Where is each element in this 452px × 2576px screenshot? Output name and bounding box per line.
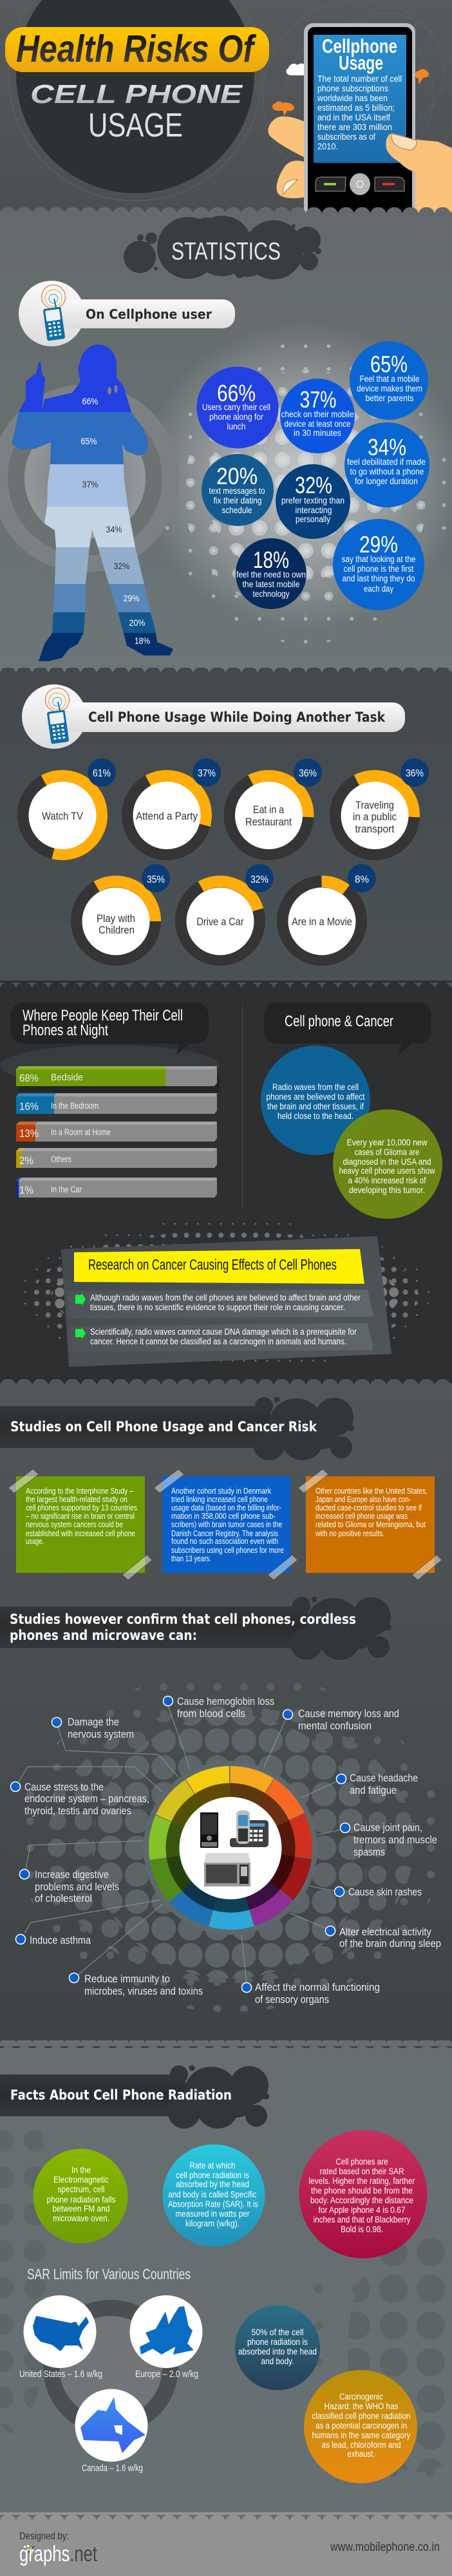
fact bubble: SAR definition: Absorption Rate (SAR). It is (168, 2199, 258, 2209)
bar: Bedside 68% (16, 1066, 220, 1092)
donut: Play with Children 35% (62, 864, 170, 974)
cancer bubble: radio waves: phones are believed to affect (267, 1092, 365, 1102)
color wheel with devices (127, 1745, 334, 1951)
stat bubble 65%: 65% (370, 351, 408, 377)
fact bubble: carcinogenic hazard (304, 2370, 417, 2483)
phone screen heading: Usage (339, 52, 383, 74)
fact bubble: SAR ratings: Bold is 0.98. (341, 2224, 383, 2234)
stat bubble 34%: feel debilitated if made (347, 457, 426, 467)
stat bubble 29%: each day (364, 584, 393, 594)
donut: Play with Children 35%: Children (99, 924, 135, 936)
credit label: Designed by: (19, 2531, 69, 2542)
title: Cell Phone: CELL PHONE (30, 79, 243, 109)
icon: orange cloud right (415, 69, 429, 84)
icon: orange cloud left (272, 102, 294, 116)
title backdrop circle (8, 0, 262, 201)
bar: In the Car 1%: In the Car (51, 1185, 82, 1194)
map: Europe (130, 2295, 202, 2380)
stat bubble 66%: 66% (217, 380, 256, 406)
effect: memory loss: Cause memory loss and (298, 1707, 399, 1720)
phone body (304, 23, 415, 223)
stat bubble 66% (197, 367, 278, 448)
fact bubble: absorption: and body. (261, 2356, 294, 2366)
donut: Attend a Party 37%: Attend a Party (136, 810, 198, 822)
bar: Bedside 68%: 68% (19, 1072, 39, 1084)
band labels: 32% (113, 561, 130, 571)
cancer bubble: glioma: developing this tumor. (349, 1185, 425, 1195)
stat bubble 65%: Feel that a mobile (359, 374, 420, 384)
stat bubble 32%: interacting (295, 505, 332, 515)
donut: Traveling in a public transport 36%: Traveling (355, 799, 394, 811)
stat bubble 32%: prefer texting than (281, 496, 344, 505)
fact bubble: SAR ratings: body. Accordingly the distance (310, 2195, 413, 2205)
cancer bubble: glioma: heavy cell phone users show (339, 1166, 435, 1176)
phone hand gaps (108, 385, 117, 395)
banner heading: Studies however confirm (0, 1597, 391, 1660)
stat bubble 29%: say that looking at the (341, 554, 416, 564)
effect: hemoglobin loss: Cause hemoglobin loss (177, 1695, 274, 1707)
section: statistics background (0, 207, 452, 675)
bar chart: where phones are kept (16, 1066, 220, 1198)
stat bubble 66%: lunch (227, 422, 246, 431)
phone screen heading: Cellphone (322, 35, 397, 57)
effect: endocrine stress (10, 1781, 149, 1817)
effect: headache: Cause headache (350, 1772, 418, 1784)
wheel rim (144, 1761, 317, 1935)
study card: other countries: increased cell phone usage was (315, 1512, 408, 1521)
bar: In the Car 1%: 1% (19, 1184, 33, 1196)
study card: Interphone: the largest health-related study on (26, 1495, 127, 1504)
fact bubble: carcinogenic hazard: classified cell phone radiation (312, 2411, 411, 2421)
stat bubble 37%: in 30 minutes (294, 428, 341, 438)
effect: sensory organs: Affect the normal functioning (255, 1981, 380, 1993)
cancer bubble: glioma: diagnosed in the USA and (343, 1157, 431, 1167)
left finger (268, 117, 306, 158)
halftone backdrop behind wheel (18, 1671, 443, 2012)
illustration: hand holding phone (263, 0, 452, 223)
fact bubble: SAR definition: cell phone radiation is (176, 2170, 249, 2180)
effect: memory loss (283, 1707, 399, 1732)
phone screen text: worldwide has been (317, 93, 388, 103)
finding one: tissues, there is no scientific evidence to support their role in causing cancer. (90, 1302, 345, 1312)
fact bubble: electromagnetic spectrum: spectrum, cell (58, 2185, 104, 2194)
fact bubble: SAR definition: measured in watts per (175, 2209, 250, 2219)
study card: Interphone (8, 1469, 152, 1580)
donut: Eat in a Restaurant 36%: Eat in a (253, 804, 284, 816)
donut: Eat in a Restaurant 36%: Restaurant (245, 816, 292, 828)
effect: endocrine stress: thyroid, testis and ovaries (24, 1805, 131, 1817)
stat bubble 20%: text messages to (209, 486, 265, 496)
research card (61, 1236, 391, 1367)
stat bubble 32% (276, 464, 350, 539)
fact bubble: electromagnetic spectrum: phone radiation falls (46, 2195, 116, 2205)
phone screen text: 2010. (317, 142, 338, 151)
donut: Play with Children 35%: Play with (97, 912, 135, 925)
finding two: cancer. Hence it cannot be classified as a carcinogen in animals and humans. (90, 1337, 346, 1346)
phone screen heading (322, 35, 397, 74)
stat bubble 65% (350, 341, 428, 420)
cancer bubble: radio waves (261, 1046, 370, 1155)
icon: cordless phone (230, 1810, 268, 1847)
stat bubble 20%: schedule (221, 505, 252, 515)
map: Canada: Canada – 1.6 w/kg (82, 2463, 143, 2474)
donut: Eat in a Restaurant 36%: 36% (299, 768, 317, 779)
stat bubble 32%: 32% (295, 472, 332, 498)
banner heading: Studies on Cell Phone Usage and Cancer Risk (0, 1397, 354, 1460)
study card: Denmark: subscribers using cell phones for more (171, 1546, 284, 1555)
fact bubble: SAR definition: absorbed by the head (176, 2179, 249, 2189)
header title group (5, 0, 269, 201)
phone screen text: and in the USA itself (317, 113, 390, 122)
effect: joint pain: tremors and muscle (353, 1834, 437, 1846)
effect: electrical activity: Alter electrical activity (339, 1926, 431, 1938)
effect: headache (336, 1772, 418, 1796)
fact bubble: electromagnetic spectrum: Electromagnetic (53, 2175, 109, 2185)
donut: Traveling in a public transport 36%: in a public (353, 811, 397, 823)
stat bubble 37%: device at least once (285, 419, 350, 429)
study card: Denmark: Another cohort study in Denmark (171, 1487, 272, 1496)
connecting ring (43, 2300, 178, 2435)
fact bubble: SAR definition: Rate at which (189, 2161, 236, 2170)
study card: Denmark: scribers) with brain tumor cases in the (171, 1520, 282, 1529)
stat bubble 65%: better parents (366, 393, 414, 403)
study card: Denmark: than 13 years. (171, 1554, 211, 1563)
effect: headache: and fatigue (350, 1784, 397, 1796)
phone screen text: phone subscriptions (317, 84, 388, 93)
bar: In the Car 1% (16, 1178, 217, 1198)
finding one (68, 1290, 373, 1319)
logo pixels (23, 2545, 34, 2553)
research heading: Research on Cancer Causing Effects of Cell Phones (88, 1256, 337, 1273)
heading text: STATISTICS (171, 238, 281, 265)
study card: Interphone: usage. (26, 1537, 44, 1546)
stat bubble 18% (236, 538, 306, 609)
speech bubble heading: Cell phone and Cancer: Cell phone & Cancer (285, 1013, 393, 1030)
icon: mobile phone (200, 1812, 218, 1848)
band labels: 66% (82, 396, 98, 406)
map: Canada (75, 2389, 148, 2474)
bar: In the Bedroom 16%: 16% (19, 1100, 39, 1113)
fact bubble: carcinogenic hazard: humans in the same category (312, 2430, 411, 2440)
study card: other countries (298, 1469, 442, 1580)
study card: Interphone: According to the Interphone Study – (26, 1487, 133, 1496)
study card: Interphone: cell phones supported by 13 countries (26, 1503, 137, 1512)
icon: white cloud (287, 64, 306, 75)
halftone backdrop behind stat bubbles (142, 322, 452, 644)
effect: digestive problems: problems and levels (35, 1881, 119, 1893)
effect: reduce immunity (70, 1973, 203, 1997)
bar: Others 2%: Others (51, 1154, 71, 1164)
banner heading: Facts About Cell Phone Radiation: Facts About Cell Phone Radiation (10, 2087, 232, 2103)
donut: Drive a Car 32%: Drive a Car (197, 916, 244, 928)
signal rings (263, 0, 452, 193)
fact bubble: absorption: absorbed into the head (238, 2347, 317, 2356)
phone buttons (315, 173, 404, 195)
study card: Interphone: nervous system cancers could be (26, 1520, 123, 1529)
section: header background (0, 0, 452, 222)
donut: Are in a Movie 8%: 8% (355, 874, 369, 885)
study card: other countries: with no positive results. (315, 1529, 384, 1538)
study card: Denmark: mation in 358,000 cell phone sub- (171, 1512, 276, 1521)
bar: Others 2% (16, 1148, 217, 1168)
right hand and thumb (386, 133, 452, 222)
icon: phone with signal (45, 688, 70, 744)
stat bubble 29% (333, 519, 424, 610)
fact bubble: SAR ratings: for Apple iphone 4 is 0.67 (318, 2205, 406, 2215)
stat bubble 32%: personally (296, 514, 330, 524)
bar: In the Bedroom 16% (16, 1093, 217, 1114)
fact bubble: absorption: phone radiation is (247, 2337, 308, 2347)
stat bubble 66%: phone along for (209, 412, 263, 422)
donut: Are in a Movie 8% (283, 864, 376, 960)
cancer bubble: glioma (333, 1109, 442, 1219)
person silhouette chart (0, 344, 173, 661)
study card: Denmark: usage data (based on the billing infor- (171, 1503, 281, 1512)
leader lines (19, 1706, 340, 1983)
phone screen text: The total number of cell (317, 74, 402, 84)
speech bubble heading: Cell phone and Cancer (264, 1002, 431, 1055)
fact bubble: carcinogenic hazard: Hazard: the WHO has (325, 2402, 399, 2411)
pill label: Cell Phone Usage While Doing Another Task (88, 710, 386, 725)
stat bubble 29%: and last thing they do (343, 574, 415, 583)
section: radiation facts background (0, 2040, 452, 2521)
band labels: 37% (82, 479, 98, 489)
band labels: 34% (106, 524, 122, 534)
title: Usage: USAGE (88, 107, 183, 144)
donut: Watch TV 61%: Watch TV (42, 810, 84, 822)
card panel (61, 1236, 391, 1367)
donut: Watch TV 61%: 61% (93, 768, 111, 779)
cloud shape (124, 216, 321, 279)
section: multitasking background (0, 668, 452, 991)
fact bubble: SAR definition: and body is called Specific (169, 2190, 257, 2199)
fact bubble: SAR ratings: the phone should be from the (311, 2186, 413, 2195)
cancer bubble: glioma: a 40% increased risk of (348, 1176, 426, 1185)
study card: other countries: Other countries like the United States, (315, 1487, 428, 1496)
cancer bubble: radio waves: Radio waves from the cell (272, 1082, 359, 1092)
effect: digestive problems: of cholesterol (35, 1892, 92, 1904)
fact bubble: carcinogenic hazard: as a potential carcinogen in (315, 2421, 407, 2430)
donut: Traveling in a public transport 36%: 36% (406, 768, 424, 779)
bar: In a Room at Home 13%: In a Room at Home (51, 1127, 111, 1137)
footer (0, 2512, 452, 2576)
donut: Drive a Car 32% (167, 864, 274, 974)
fact bubble: SAR ratings: levels. Higher the rating, farther (309, 2176, 415, 2186)
fact bubble: electromagnetic spectrum: microwave oven. (53, 2214, 109, 2223)
stat bubble 20%: fix their dating (214, 496, 261, 505)
stat bubble 29%: 29% (359, 531, 398, 558)
donut: Play with Children 35%: 35% (147, 874, 165, 885)
effect: damage nervous system: nervous system (68, 1728, 134, 1740)
map: United States: United States – 1.6 w/kg (19, 2369, 102, 2380)
fact bubble: electromagnetic spectrum (33, 2149, 127, 2243)
phone screen text: estimated as 5 billion; (317, 103, 395, 113)
effect: digestive problems (19, 1868, 119, 1904)
fact bubble: electromagnetic spectrum: between FM and (53, 2204, 109, 2214)
icon: microwave (204, 1853, 250, 1886)
heading pill: On Cellphone user (19, 281, 235, 346)
finding two (69, 1323, 373, 1352)
effect: memory loss: mental confusion (298, 1720, 372, 1732)
effect: joint pain: Cause joint pain, (353, 1821, 422, 1834)
fact bubble: carcinogenic hazard: exhaust. (348, 2449, 375, 2459)
effect: sensory organs: of sensory organs (255, 1993, 329, 2006)
cancer bubble: radio waves: held close to the head. (278, 1111, 353, 1121)
donut: Attend a Party 37%: 37% (198, 768, 216, 779)
stat bubble 20%: 20% (216, 463, 258, 489)
left thumb (277, 161, 306, 198)
effect: hemoglobin loss: from blood cells (177, 1707, 245, 1720)
yellow heading strip (74, 1249, 364, 1284)
band labels: 20% (129, 617, 146, 628)
pill label: On Cellphone user (86, 306, 212, 322)
stat bubble 18%: 18% (253, 547, 289, 573)
donut: Watch TV 61% (10, 758, 116, 868)
effect: electrical activity (326, 1926, 441, 1950)
effect: endocrine stress: Cause stress to the (24, 1781, 104, 1793)
fact bubble: carcinogenic hazard: Carcinogenic (339, 2392, 383, 2402)
effect: endocrine stress: endocrine system – pancreas, (24, 1792, 149, 1805)
divider (242, 1004, 243, 1208)
bar: Others 2%: 2% (19, 1154, 33, 1167)
stacked bands (12, 344, 173, 661)
title ribbon (5, 27, 269, 72)
fact bubble: SAR ratings: rated based on their SAR (319, 2167, 404, 2176)
section: studies background (0, 1379, 452, 2050)
fact bubble: SAR ratings (299, 2130, 428, 2259)
stat bubble 66%: Users carry their cell (202, 402, 270, 412)
donut: Traveling in a public transport 36% (322, 758, 429, 868)
icon: phone with signal (41, 285, 66, 341)
stat bubble 37%: 37% (300, 386, 336, 413)
fact bubble: SAR definition (162, 2144, 265, 2247)
banner heading: Facts About Cell Phone Radiation (0, 2065, 269, 2129)
banner heading: Studies however confirm: phones and microwave can: (10, 1628, 197, 1643)
fact bubble: SAR ratings: Cell phones are (336, 2157, 388, 2167)
section: night and cancer background (0, 981, 452, 1391)
study card: Denmark: found no such association even with (171, 1537, 278, 1546)
stat bubble 20% (202, 454, 274, 526)
fact bubble: electromagnetic spectrum: In the (71, 2165, 91, 2175)
finding one: Although radio waves from the cell phones are believed to affect brain and other (90, 1293, 361, 1302)
concentric rings (0, 384, 179, 572)
effect: digestive problems: Increase digestive (35, 1868, 109, 1881)
phone screen text: there are 303 million (317, 122, 392, 132)
effect: asthma: Induce asthma (30, 1934, 91, 1946)
effect: sensory organs (242, 1981, 380, 2006)
effect: reduce immunity: Reduce immunity to (84, 1973, 170, 1985)
donut: Traveling in a public transport 36%: transport (355, 823, 395, 835)
dark inner segments (149, 1767, 312, 1929)
effect: reduce immunity: microbes, viruses and toxins (84, 1985, 203, 1997)
speech bubble heading: Where People Keep Their Cell Phones at Night: Phones at Night (23, 1022, 108, 1039)
band labels: 18% (135, 635, 150, 646)
effect: damage nervous system (52, 1716, 134, 1740)
SAR limits diagram (19, 2295, 202, 2474)
bright segments (127, 1745, 334, 1951)
stat bubble 37%: check on their mobile (281, 409, 354, 419)
stat bubble 34%: to go without a phone (350, 467, 424, 476)
stat bubble 34%: 34% (368, 434, 406, 460)
study card: other countries: Japan and Europe also have con- (315, 1495, 411, 1504)
donut: Attend a Party 37% (114, 758, 221, 868)
heading: SAR Limits: SAR Limits for Various Countries (27, 2266, 191, 2282)
effect: joint pain: spasms (353, 1846, 385, 1858)
donut: Are in a Movie 8%: Are in a Movie (292, 916, 352, 928)
donut: Eat in a Restaurant 36% (216, 758, 322, 868)
effect: hemoglobin loss (164, 1695, 274, 1720)
cancer bubble: glioma: cases of Glioma are (354, 1147, 420, 1157)
effect: joint pain (340, 1821, 437, 1858)
study card: Interphone: – no significant rise in brain or central (26, 1512, 135, 1521)
fact bubble: carcinogenic hazard: as lead, chloroform and (322, 2440, 400, 2450)
band labels: 65% (81, 436, 97, 446)
stat bubble 18%: technology (252, 589, 290, 599)
halftone backdrop behind research card (21, 1219, 430, 1371)
bar: In a Room at Home 13% (16, 1122, 217, 1142)
cancer bubble: glioma: Every year 10,000 new (346, 1138, 428, 1147)
study card: Denmark: tried linking increased cell phone (171, 1495, 268, 1504)
logo wordmark: graphs.net (19, 2542, 97, 2566)
fact bubble: absorption (235, 2305, 320, 2390)
stat bubble 34% (344, 422, 429, 507)
bar: Bedside 68%: Bedside (51, 1072, 83, 1083)
stat bubble 65%: device makes them (357, 384, 422, 393)
stat bubble 37% (280, 379, 355, 453)
band labels (81, 396, 150, 646)
study card: other countries: ducted case-control studies to see if (315, 1503, 422, 1512)
cancer bubble: radio waves: the brain and other tissues, if (267, 1102, 364, 1111)
study card: other countries: related to Glioma or Meningioma, but (315, 1520, 426, 1529)
bar: In the Bedroom 16%: In the Bedroom (51, 1101, 99, 1111)
map: Europe: Europe – 2.0 w/kg (135, 2369, 198, 2380)
statistics cloud heading (124, 216, 321, 279)
heading pill: Cell Phone Usage While Doing Another Task (22, 684, 405, 749)
effect: skin rashes: Cause skin rashes (348, 1886, 422, 1898)
study card: Denmark (154, 1469, 297, 1580)
phone screen text (317, 74, 402, 151)
fact bubble: SAR definition: kilogram (w/kg). (185, 2219, 240, 2228)
effect: damage nervous system: Damage the (68, 1716, 119, 1728)
stat bubble 18%: feel the need to own (236, 570, 306, 579)
white centre (179, 1797, 282, 1899)
study card: Interphone: established with increased cell phone (26, 1529, 135, 1538)
phone screen text: subscribers as of (317, 132, 375, 142)
map: United States (19, 2295, 102, 2380)
banner heading: Studies however confirm: Studies however confirm that cell phones, cordless (10, 1612, 356, 1627)
fact bubble: absorption: 50% of the cell (251, 2327, 304, 2337)
donut: Drive a Car 32%: 32% (250, 874, 268, 885)
study card: Denmark: Danish Cancer Registry. The analysis (171, 1529, 278, 1538)
stat bubble 34%: for longer duration (355, 476, 418, 486)
speech bubble heading: Where People Keep Their Cell Phones at Night: Where People Keep Their Cell (23, 1007, 183, 1024)
bar: In a Room at Home 13%: 13% (19, 1127, 39, 1140)
title: Health Risks Of: Health Risks Of (16, 28, 257, 70)
stat bubble 29%: cell phone is the first (344, 564, 414, 574)
finding two: Scientifically, radio waves cannot cause DNA damage which is a prerequisite for (90, 1327, 357, 1337)
band labels: 29% (124, 593, 139, 603)
fact bubble: SAR ratings: inches and that of Blackberry (313, 2215, 411, 2224)
banner heading: Studies on Cell Phone Usage and Cancer Risk: Studies on Cell Phone Usage and Cancer Risk (10, 1419, 317, 1434)
speech bubble heading: Where People Keep Their Cell Phones at Night (10, 1002, 209, 1055)
stat bubble 18%: the latest mobile (242, 579, 300, 589)
